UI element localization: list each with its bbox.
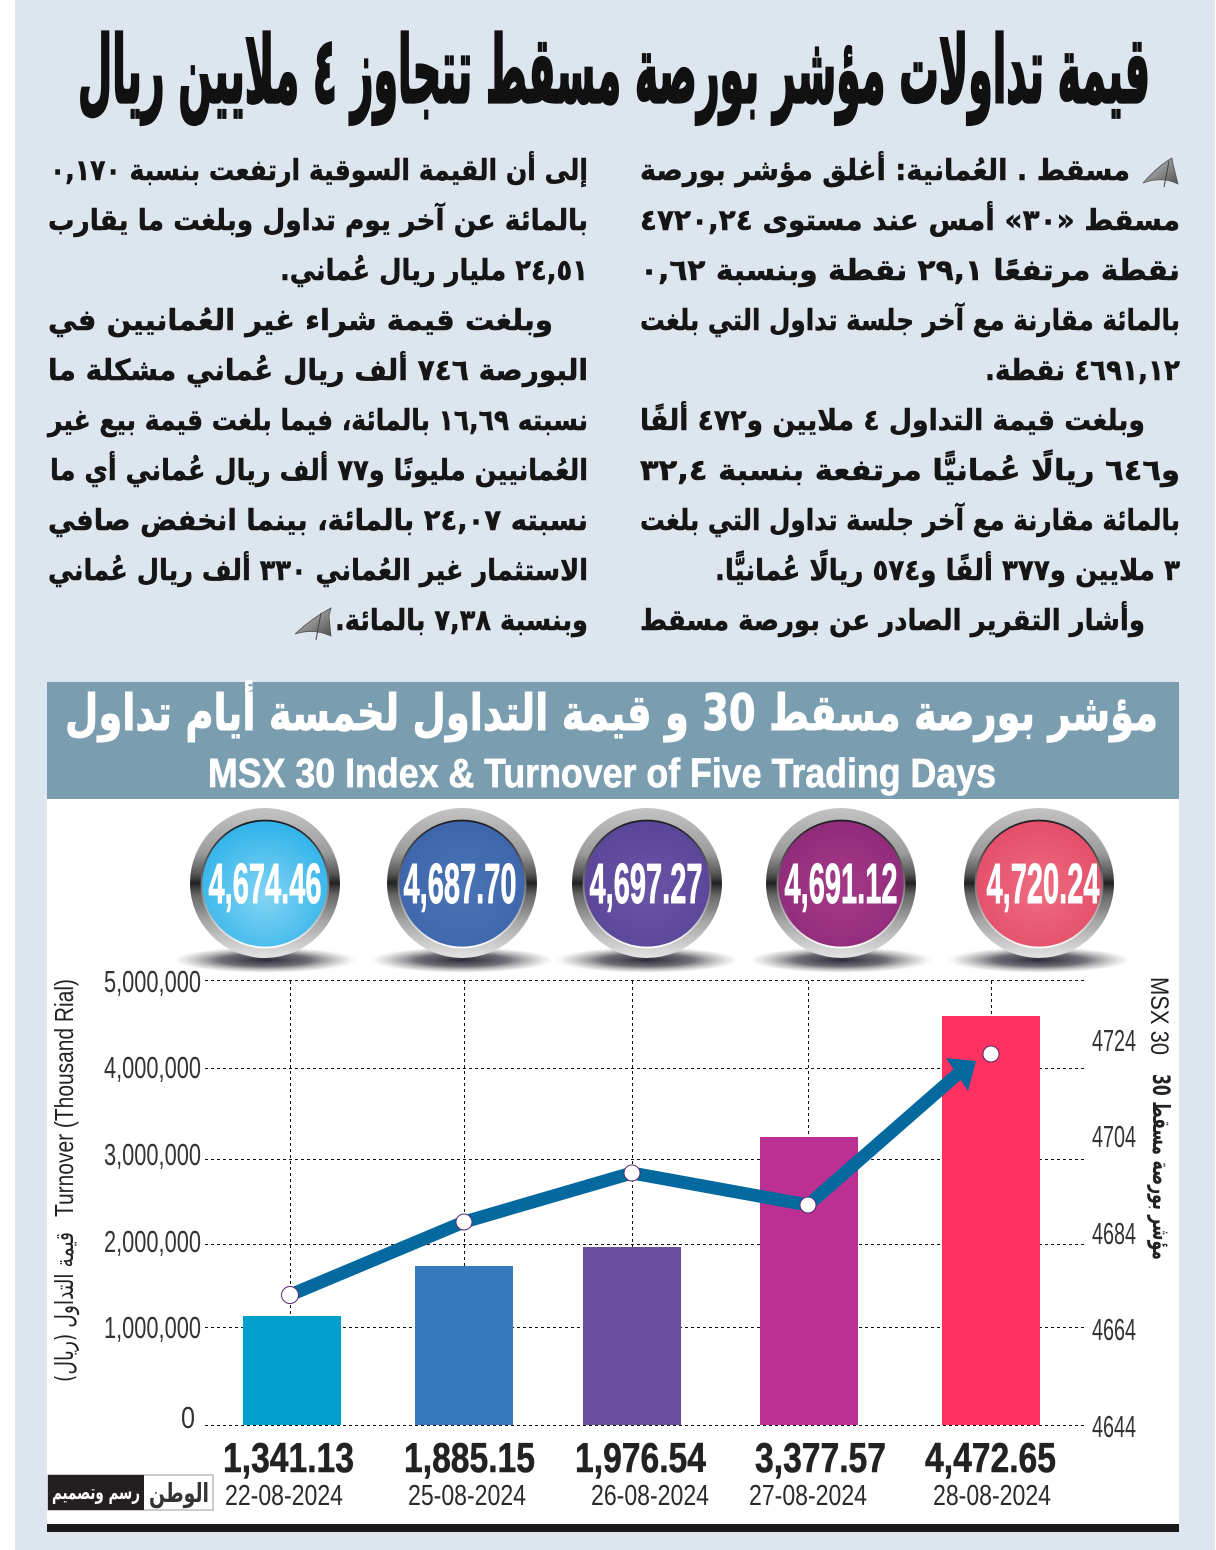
left axis labels bbox=[104, 964, 201, 1435]
index value badges bbox=[173, 808, 1131, 973]
right axis labels: 4724 bbox=[1092, 1023, 1136, 1058]
index trend arrow bbox=[290, 1058, 976, 1295]
text line: بالمائة عن آخر يوم تداول وبلغت ما يقارب bbox=[48, 202, 588, 237]
right axis labels: 4644 bbox=[1092, 1409, 1136, 1444]
left axis title bbox=[49, 979, 80, 1382]
right axis labels: 4664 bbox=[1092, 1312, 1136, 1347]
dates: 27-08-2024 bbox=[749, 1480, 867, 1512]
text line: ٤٦٩١,١٢ نقطة. bbox=[985, 353, 1180, 387]
right axis labels: 4684 bbox=[1092, 1216, 1136, 1251]
left axis labels: 1,000,000 bbox=[104, 1310, 201, 1345]
text line: إلى أن القيمة السوقية ارتفعت بنسبة ٠,١٧٠ bbox=[50, 151, 588, 188]
left axis labels: 5,000,000 bbox=[104, 964, 201, 999]
data markers bbox=[282, 1046, 999, 1304]
badge: 25-08 bbox=[370, 808, 554, 973]
turnover values: 4,472.65 bbox=[925, 1434, 1056, 1481]
turnover values: 1,341.13 bbox=[223, 1434, 354, 1481]
chart panel background bbox=[47, 799, 1179, 1525]
text line: ٣ ملايين و٣٧٧ ألفًا و٥٧٤ ريالًا عُمانيًّا. bbox=[715, 550, 1180, 587]
text line: نسبته ٢٤,٠٧ بالمائة، بينما انخفض صافي bbox=[48, 503, 588, 537]
chart grid bbox=[205, 980, 1085, 1426]
text line: وبلغت قيمة شراء غير العُمانيين في bbox=[48, 303, 553, 337]
bottom rule bbox=[47, 1524, 1179, 1532]
badge: 28-08: 4,720.24 bbox=[986, 852, 1100, 916]
badge: 27-08 bbox=[749, 808, 933, 973]
badge: 22-08: 4,674.46 bbox=[208, 852, 322, 916]
right axis labels: 4704 bbox=[1092, 1119, 1136, 1154]
left axis title: قيمة التداول (ريال) bbox=[50, 1232, 80, 1382]
icon: sail end mark bbox=[295, 608, 331, 640]
left axis title: Turnover (Thousand Rial) bbox=[49, 979, 79, 1217]
dates: 28-08-2024 bbox=[933, 1480, 1051, 1512]
text line: مسقط . العُمانية: أغلق مؤشر بورصة bbox=[640, 151, 1130, 187]
bar: 28-08 bbox=[942, 1016, 1040, 1425]
bar: 22-08 bbox=[243, 1316, 341, 1425]
text line: وبلغت قيمة التداول ٤ ملايين و٤٧٢ ألفًا bbox=[640, 401, 1145, 437]
text line: و٦٤٦ ريالًا عُمانيًّا مرتفعة بنسبة ٣٢,٤ bbox=[640, 450, 1180, 487]
text line: العُمانيين مليونًا و٧٧ ألف ريال عُماني أي ما bbox=[50, 451, 588, 487]
text line: نسبته ١٦,٦٩ بالمائة، فيما بلغت قيمة بيع غير bbox=[46, 403, 588, 437]
left axis labels: 4,000,000 bbox=[104, 1050, 201, 1085]
text line: البورصة ٧٤٦ ألف ريال عُماني مشكلة ما bbox=[48, 351, 588, 387]
badge: 27-08: 4,691.12 bbox=[784, 852, 898, 916]
text line: الاستثمار غير العُماني ٣٣٠ ألف ريال عُماني bbox=[48, 551, 588, 587]
bar: 26-08 bbox=[583, 1247, 681, 1425]
turnover values: 1,885.15 bbox=[404, 1434, 535, 1481]
dates: 25-08-2024 bbox=[408, 1480, 526, 1512]
badge: 26-08 bbox=[555, 808, 739, 973]
text line: مسقط «٣٠» أمس عند مستوى ٤٧٢٠,٢٤ bbox=[640, 201, 1180, 237]
left axis labels: 3,000,000 bbox=[104, 1137, 201, 1172]
right axis title: مؤشر بورصة مسقط 30 bbox=[1147, 1074, 1175, 1260]
combo chart: turnover bars and index line bbox=[49, 964, 1175, 1512]
dates: 22-08-2024 bbox=[225, 1480, 343, 1512]
badge: 25-08: 4,687.70 bbox=[404, 852, 516, 916]
left axis labels: 2,000,000 bbox=[104, 1224, 201, 1259]
badge: 26-08: 4,697.27 bbox=[590, 852, 702, 916]
badge: 28-08 bbox=[947, 808, 1131, 973]
badge: 22-08 bbox=[173, 808, 357, 973]
text line: ٢٤,٥١ مليار ريال عُماني. bbox=[280, 253, 588, 287]
bar: 25-08 bbox=[415, 1266, 513, 1425]
text line: وأشار التقرير الصادر عن بورصة مسقط bbox=[640, 601, 1145, 637]
turnover values: 3,377.57 bbox=[755, 1434, 886, 1481]
article column: right bbox=[640, 151, 1180, 637]
article column: left bbox=[46, 151, 588, 640]
left axis labels: 0 bbox=[181, 1400, 195, 1435]
icon: sail bullet bbox=[1143, 158, 1178, 187]
text line: وبنسبة ٧,٣٨ بالمائة. bbox=[335, 603, 588, 637]
turnover values: 1,976.54 bbox=[575, 1434, 707, 1481]
right axis labels bbox=[1092, 1023, 1136, 1444]
text line: نقطة مرتفعًا ٢٩,١ نقطة وبنسبة ٠,٦٢ bbox=[640, 253, 1180, 287]
credit logo: رسم وتصميم bbox=[52, 1480, 140, 1504]
heading: english: MSX 30 Index & Turnover of Five Trading Days bbox=[208, 750, 996, 796]
right axis title: MSX 30 bbox=[1145, 977, 1173, 1055]
bar: 27-08 bbox=[760, 1137, 858, 1425]
credit logo bbox=[48, 1475, 213, 1510]
dates bbox=[225, 1480, 1051, 1512]
right axis title bbox=[1145, 977, 1175, 1260]
dates: 26-08-2024 bbox=[591, 1480, 709, 1512]
credit logo: الوطن bbox=[149, 1479, 209, 1509]
turnover values bbox=[223, 1434, 1056, 1481]
chart header banner bbox=[47, 680, 1179, 799]
